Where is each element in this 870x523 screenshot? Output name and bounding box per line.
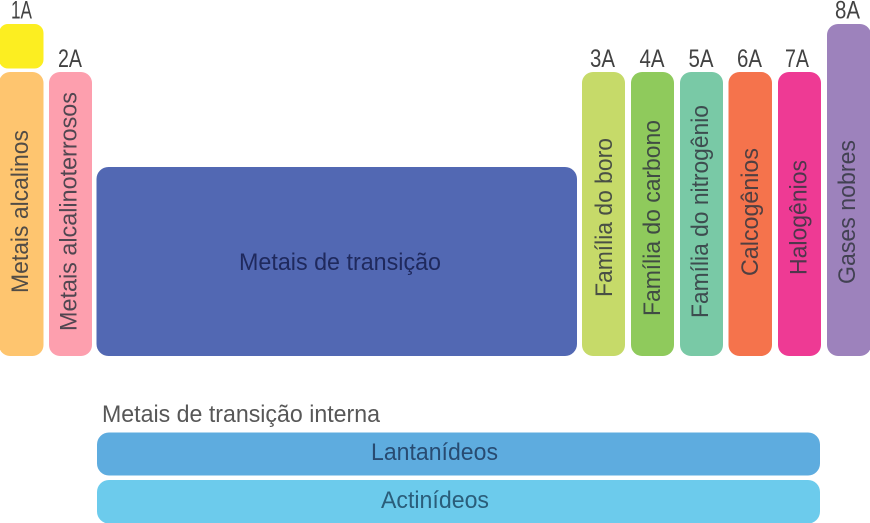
column: metais alcalinos xyxy=(0,72,44,356)
column: família do carbono xyxy=(631,72,674,356)
hydrogen cell: yellow xyxy=(0,24,44,68)
group label 6A: 6A xyxy=(737,45,762,73)
column: metais alcalinoterrosos xyxy=(49,72,92,356)
group label 4A: 4A xyxy=(640,45,665,73)
row: lantanídeos: Lantanídeos xyxy=(371,439,498,466)
heading: metais de transição interna: Metais de transição interna xyxy=(102,401,380,428)
column: família do boro: Família do boro xyxy=(591,138,618,297)
column: halogênios: Halogênios xyxy=(786,160,812,275)
column: halogênios xyxy=(778,72,821,356)
row: actinídeos: Actinídeos xyxy=(381,487,489,514)
column: família do boro xyxy=(582,72,625,356)
column: família do carbono: Família do carbono xyxy=(639,120,666,316)
column: metais alcalinoterrosos: Metais alcalinoterrosos xyxy=(56,92,82,331)
group label 7A: 7A xyxy=(785,45,809,73)
column: família do nitrogênio: Família do nitrogênio xyxy=(687,105,714,318)
column: gases nobres xyxy=(827,24,870,356)
block: metais de transição: Metais de transição xyxy=(239,249,441,276)
block: metais de transição xyxy=(96,167,577,356)
column: metais alcalinos: Metais alcalinos xyxy=(7,130,34,293)
row: lantanídeos xyxy=(97,432,820,476)
column: calcogênios xyxy=(728,72,772,356)
row: actinídeos xyxy=(97,480,820,523)
column: gases nobres: Gases nobres xyxy=(834,140,861,284)
column: calcogênios: Calcogênios xyxy=(737,148,764,276)
column: família do nitrogênio xyxy=(680,72,723,356)
group label 3A: 3A xyxy=(590,45,615,73)
group label 2A: 2A xyxy=(58,45,82,73)
group label 5A: 5A xyxy=(688,45,714,73)
